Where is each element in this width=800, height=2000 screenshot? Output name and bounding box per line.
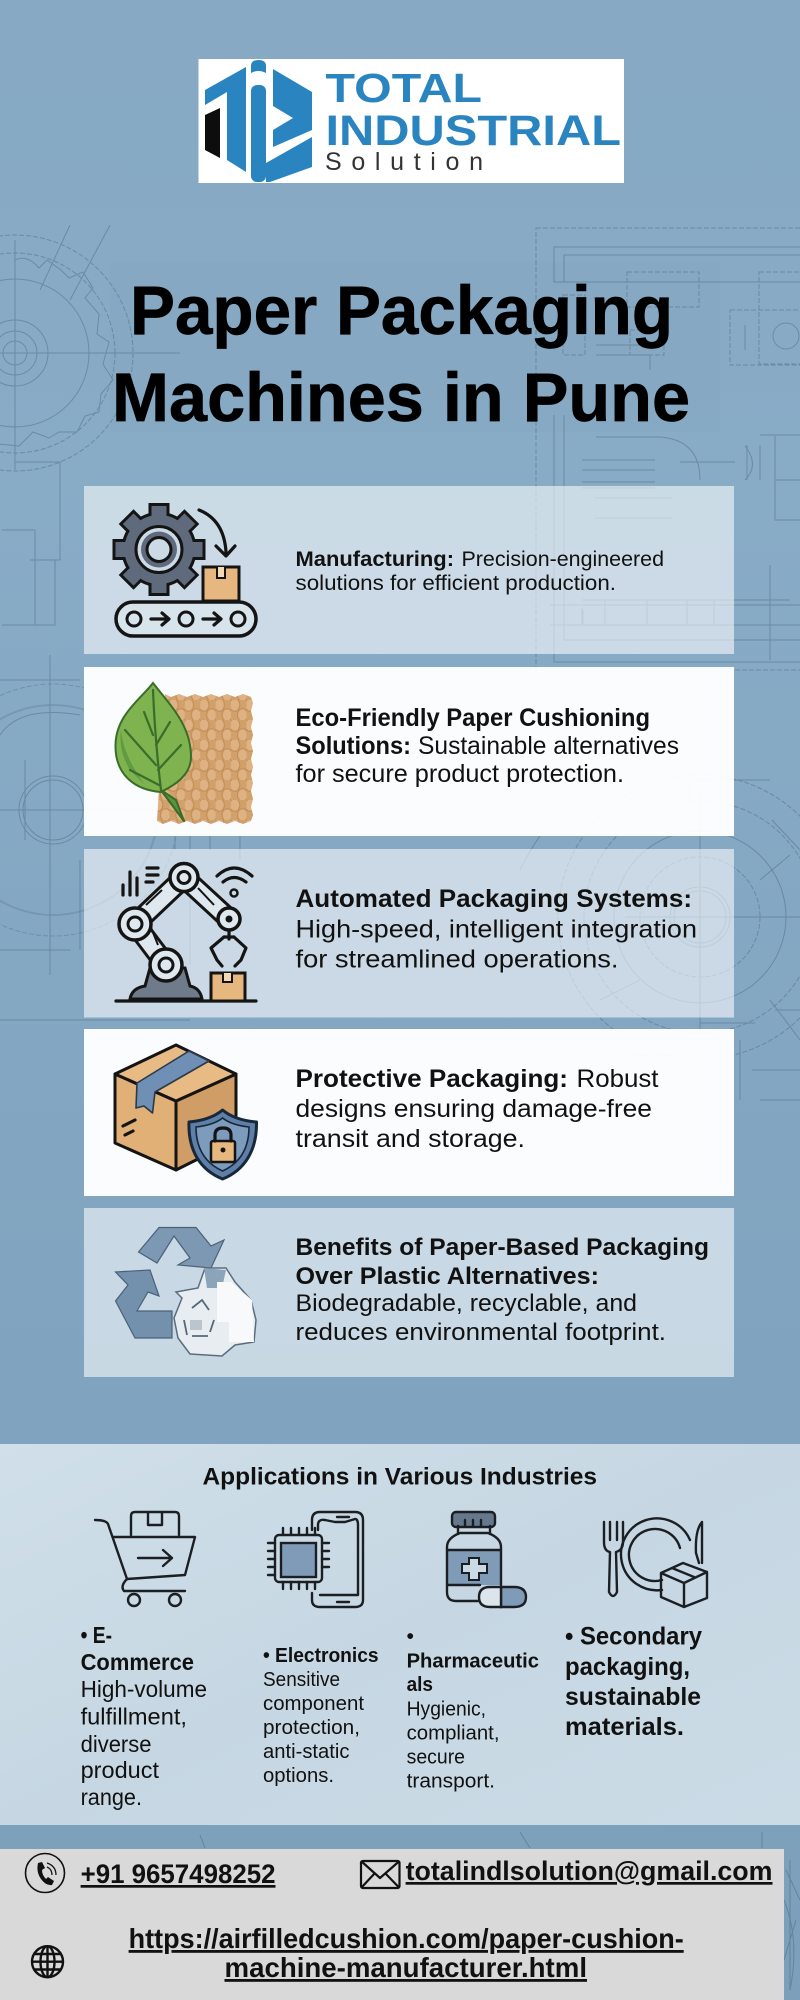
icon: chip and phone (268, 1512, 363, 1607)
text: e-commerce: product (81, 1757, 160, 1783)
text: benefits: Over Plastic Alternatives: (296, 1263, 599, 1290)
text: e-commerce (81, 1622, 207, 1810)
icon: box with shield (115, 1045, 257, 1179)
text: website url: machine-manufacturer.html (224, 1952, 587, 1983)
text: electronics: options. (263, 1764, 334, 1787)
text: secondary packaging: sustainable (565, 1683, 701, 1711)
text: website url (129, 1923, 684, 1983)
logo mark (205, 60, 312, 182)
text: manufacturing: solutions for efficient production. (296, 572, 616, 595)
icon: medicine bottle and pill (447, 1512, 526, 1607)
text: e-commerce: range. (81, 1784, 142, 1810)
text: protective packaging (296, 1065, 659, 1153)
text: benefits: Biodegradable, recyclable, and (296, 1290, 637, 1317)
text: secondary packaging: packaging, (565, 1653, 690, 1681)
text: electronics: • Electronics (263, 1644, 379, 1667)
text: automated packaging: for streamlined operations. (296, 946, 618, 974)
text: e-commerce: High-volume (81, 1676, 207, 1702)
text: benefits: reduces environmental footprint. (296, 1319, 666, 1346)
text: manufacturing (296, 548, 664, 595)
text: benefits: Benefits of Paper-Based Packaging (296, 1234, 709, 1261)
text: phone number: +91 9657498252 (81, 1859, 275, 1889)
text: automated packaging: Automated Packaging Systems: (296, 885, 692, 913)
text: website url: https://airfilledcushion.com/paper-cushion- (129, 1923, 684, 1954)
panel: eco-friendly (84, 667, 734, 836)
title: Paper Packaging (130, 272, 673, 349)
title: Machines in Pune (112, 359, 690, 436)
text: pharmaceuticals: Hygienic, (407, 1698, 486, 1720)
text: electronics: protection, (263, 1716, 360, 1739)
panel: automated packaging (84, 849, 734, 1018)
panel: benefits (84, 1208, 734, 1377)
text: automated packaging: High-speed, intelligent integration (296, 916, 697, 944)
text: e-commerce: • E- (81, 1622, 112, 1648)
panel: protective packaging (84, 1029, 734, 1196)
text: e-commerce: Commerce (81, 1649, 194, 1675)
text: secondary packaging: • Secondary (565, 1622, 702, 1650)
logo: INDUSTRIAL (326, 107, 621, 155)
text: automated packaging (296, 885, 697, 974)
icon: envelope (361, 1861, 400, 1888)
text: secondary packaging: materials. (565, 1713, 684, 1741)
panel: manufacturing (84, 486, 734, 654)
text: e-commerce: fulfillment, (81, 1704, 187, 1730)
text: eco-friendly: for secure product protection. (296, 760, 624, 788)
logo (198, 59, 624, 183)
icon: gear and conveyor (114, 504, 256, 636)
text: pharmaceuticals: • (407, 1625, 414, 1648)
text: eco-friendly: Sustainable alternatives (418, 732, 679, 760)
text: email: totalindlsolution@gmail.com (406, 1856, 772, 1886)
panel: contact footer (0, 1849, 784, 2000)
icon: leaf and honeycomb paper (115, 683, 253, 824)
text: pharmaceuticals: secure (407, 1746, 465, 1768)
text: manufacturing: Manufacturing: (296, 548, 454, 571)
icon: shopping cart (95, 1512, 195, 1606)
text: electronics: component (263, 1692, 364, 1715)
heading: applications: Applications in Various Industries (202, 1464, 597, 1490)
text: protective packaging: transit and storage. (296, 1125, 525, 1153)
text: protective packaging: Robust (576, 1065, 659, 1093)
icon: cutlery and box (604, 1518, 707, 1607)
logo: Solution (325, 148, 483, 176)
title (112, 272, 690, 436)
text: pharmaceuticals: transport. (407, 1770, 495, 1792)
text: pharmaceuticals (407, 1625, 539, 1792)
text: benefits (296, 1234, 709, 1346)
text: electronics: Sensitive (263, 1668, 340, 1691)
panel: applications (0, 1444, 800, 1825)
icon: recycle with paper (116, 1228, 256, 1356)
icon: globe (32, 1946, 63, 1977)
icon: phone (26, 1854, 64, 1892)
text: eco-friendly (296, 704, 679, 788)
logo: TOTAL (326, 65, 482, 111)
text: protective packaging: designs ensuring damage-free (296, 1095, 652, 1123)
text: protective packaging: Protective Packaging: (296, 1065, 568, 1093)
text: manufacturing: Precision-engineered (462, 548, 664, 571)
text: pharmaceuticals: als (407, 1673, 433, 1696)
text: eco-friendly: Eco-Friendly Paper Cushioning (296, 704, 650, 732)
text: pharmaceuticals: compliant, (407, 1722, 500, 1744)
text: secondary packaging (565, 1622, 702, 1741)
text: pharmaceuticals: Pharmaceutic (407, 1650, 539, 1672)
text: electronics (263, 1644, 379, 1787)
text: e-commerce: diverse (81, 1731, 152, 1757)
text: electronics: anti-static (263, 1740, 350, 1763)
icon: robot arm (116, 864, 256, 1001)
text: eco-friendly: Solutions: (296, 732, 411, 760)
